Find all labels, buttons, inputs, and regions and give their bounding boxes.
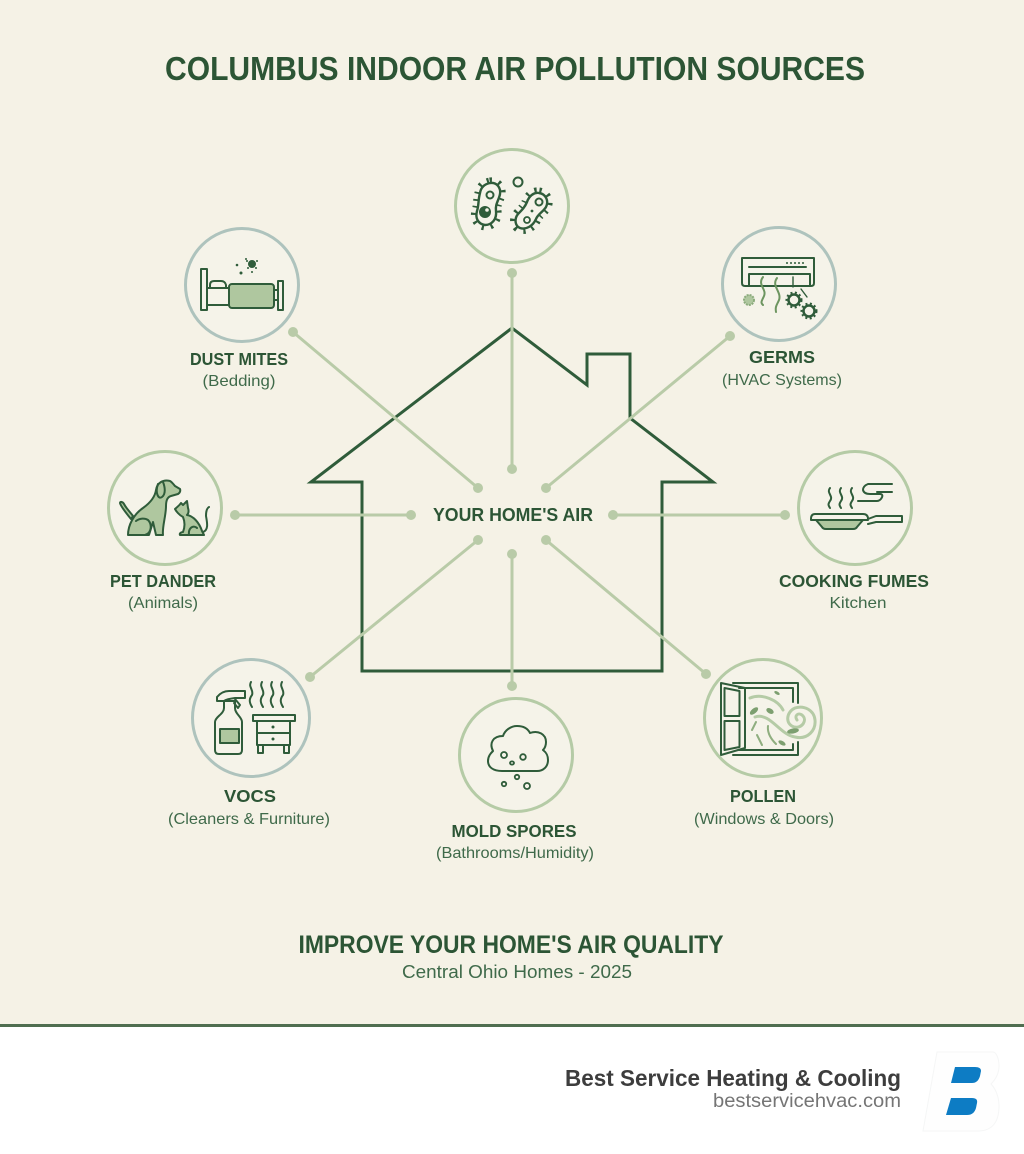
label: dust mites: DUST MITES	[190, 349, 288, 369]
label: pollen: POLLEN	[730, 786, 796, 806]
label: pet dander: PET DANDER	[110, 571, 216, 591]
center label: YOUR HOME'S AIR	[433, 504, 593, 525]
label: vocs	[168, 786, 330, 828]
label: germs	[722, 347, 842, 389]
label: cooking fumes	[779, 571, 929, 612]
icon: spray bottle and nightstand	[192, 660, 310, 776]
house outline	[311, 328, 713, 671]
label: mold spores: MOLD SPORES	[452, 821, 576, 841]
label: mold spores	[436, 821, 594, 862]
icon: dog and cat	[108, 452, 222, 564]
icon: frying pan	[798, 452, 912, 564]
footer url: bestservicehvac.com	[713, 1091, 901, 1112]
footer company name: Best Service Heating & Cooling	[565, 1065, 901, 1091]
label: pet dander	[110, 571, 216, 612]
closing subheading: Central Ohio Homes - 2025	[402, 962, 632, 982]
label: pollen: (Windows & Doors)	[694, 811, 834, 828]
label: vocs: VOCS	[224, 786, 276, 806]
icon: logo	[923, 1052, 999, 1131]
label: germs: (HVAC Systems)	[722, 372, 842, 389]
icon: HVAC unit with germs	[722, 228, 836, 340]
label: pollen	[694, 786, 834, 828]
label: mold spores: (Bathrooms/Humidity)	[436, 845, 594, 862]
label: germs: GERMS	[749, 347, 815, 367]
connector lines	[230, 268, 790, 691]
icon: mold cloud	[460, 698, 572, 812]
icon: window with pollen wind	[704, 660, 822, 776]
label: dust mites: (Bedding)	[202, 373, 276, 390]
label: pet dander: (Animals)	[128, 595, 198, 612]
footer band	[0, 1024, 1024, 1154]
label: cooking fumes: COOKING FUMES	[779, 571, 929, 591]
label: dust mites	[190, 349, 288, 390]
icon: bacteria	[456, 150, 568, 262]
label: vocs: (Cleaners & Furniture)	[168, 811, 330, 828]
label: cooking fumes: Kitchen	[830, 595, 886, 612]
icon: bed with dust mites	[186, 228, 298, 342]
title: COLUMBUS INDOOR AIR POLLUTION SOURCES	[165, 50, 865, 87]
closing heading: IMPROVE YOUR HOME'S AIR QUALITY	[298, 931, 724, 959]
